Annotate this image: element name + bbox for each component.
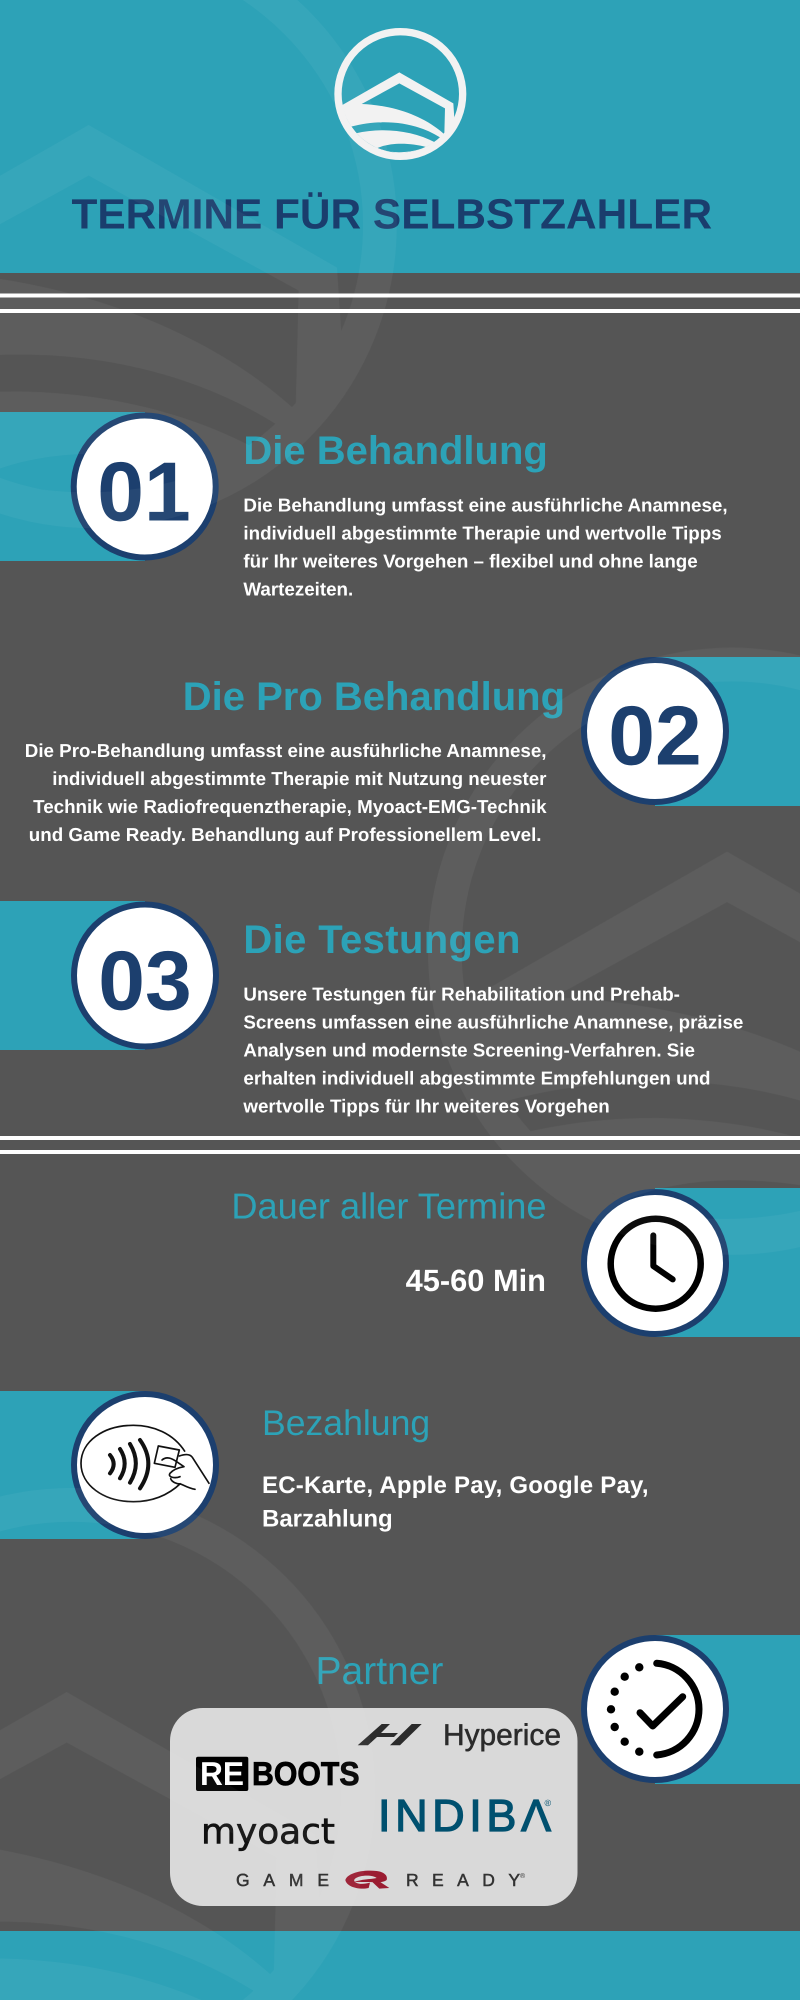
duration value: 45-60 Min — [406, 1263, 546, 1298]
header band — [0, 0, 800, 273]
text 03: Screens umfassen eine ausführliche Anamnese, präzise — [243, 1012, 743, 1033]
panel: Die Testungen — [0, 901, 743, 1117]
logo: Game Ready — [236, 1870, 526, 1890]
logo: Indiba: INDIBΛ — [378, 1790, 551, 1841]
panel: Partner — [170, 1635, 800, 1906]
text 03: Unsere Testungen für Rehabilitation und Prehab- — [243, 984, 680, 1005]
icon: contactless payment — [74, 1394, 216, 1536]
heading Partner: Partner — [316, 1650, 443, 1693]
payment methods: EC-Karte, Apple Pay, Google Pay, — [262, 1472, 648, 1499]
panel: Dauer — [231, 1186, 800, 1337]
teal band 02 — [655, 657, 800, 806]
heading 02: Die Pro Behandlung — [183, 675, 565, 719]
logo: Game Ready: READY — [406, 1870, 520, 1890]
icon: check badge — [584, 1638, 726, 1780]
partner logo panel — [170, 1708, 578, 1906]
text 02: Die Pro-Behandlung umfasst eine ausführliche Anamnese, — [25, 740, 546, 761]
number badge 01: 01 — [97, 445, 191, 539]
text 01: Wartezeiten. — [243, 578, 353, 600]
text 02 — [25, 740, 547, 845]
heading Dauer: Dauer aller Termine — [231, 1186, 546, 1226]
number badge 03: 03 — [98, 934, 192, 1028]
title: TERMINE FÜR SELBSTZAHLER — [72, 190, 712, 238]
text 01: Die Behandlung umfasst eine ausführliche Anamnese, — [243, 494, 728, 516]
text 01 — [243, 494, 728, 600]
panel: Bezahlung — [0, 1391, 648, 1539]
footer band — [0, 1931, 800, 2000]
number badge 02 — [584, 660, 726, 802]
logo — [338, 32, 463, 156]
logo: Hyperice: Hyperice — [443, 1719, 561, 1752]
text 03 — [242, 984, 743, 1117]
logo: myoact: myoact — [201, 1811, 335, 1852]
heading 01: Die Behandlung — [243, 429, 548, 473]
logo: Game Ready: ® — [520, 1873, 526, 1880]
teal band 01 — [0, 412, 145, 561]
heading Bezahlung: Bezahlung — [262, 1403, 430, 1443]
logo: Hyperice — [358, 1719, 561, 1752]
number badge 01 — [74, 416, 216, 558]
logo: Indiba: ® — [544, 1798, 552, 1808]
text 02: und Game Ready. Behandlung auf Professionellem Level. — [29, 824, 542, 845]
heading 03: Die Testungen — [243, 918, 520, 962]
panel: Die Pro Behandlung — [25, 657, 800, 845]
number badge 02: 02 — [608, 688, 702, 782]
teal band 03 — [0, 901, 145, 1050]
logo: Reboots: BOOTS — [252, 1755, 360, 1792]
number badge 03 — [74, 904, 216, 1046]
text 02: Technik wie Radiofrequenztherapie, Myoact-EMG-Technik — [33, 796, 547, 817]
logo: Reboots — [196, 1755, 360, 1792]
text 03: erhalten individuell abgestimmte Empfehlungen und — [243, 1068, 711, 1089]
text 01: individuell abgestimmte Therapie und wertvolle Tipps — [243, 522, 722, 544]
icon: clock — [584, 1192, 726, 1334]
logo: Game Ready: GAME — [236, 1870, 329, 1890]
panel: Die Behandlung — [0, 412, 728, 600]
teal band clock — [655, 1188, 800, 1337]
logo: Reboots: RE — [200, 1755, 244, 1792]
payment methods: Barzahlung — [262, 1506, 393, 1533]
payment methods — [262, 1472, 648, 1533]
teal band check — [655, 1635, 800, 1784]
text 03: wertvolle Tipps für Ihr weiteres Vorgehen — [242, 1096, 610, 1117]
text 01: für Ihr weiteres Vorgehen – flexibel und ohne lange — [243, 550, 698, 572]
text 02: individuell abgestimmte Therapie mit Nutzung neuester — [52, 768, 547, 789]
text 03: Analysen und modernste Screening-Verfahren. Sie — [243, 1040, 695, 1061]
teal band payment — [0, 1391, 145, 1539]
